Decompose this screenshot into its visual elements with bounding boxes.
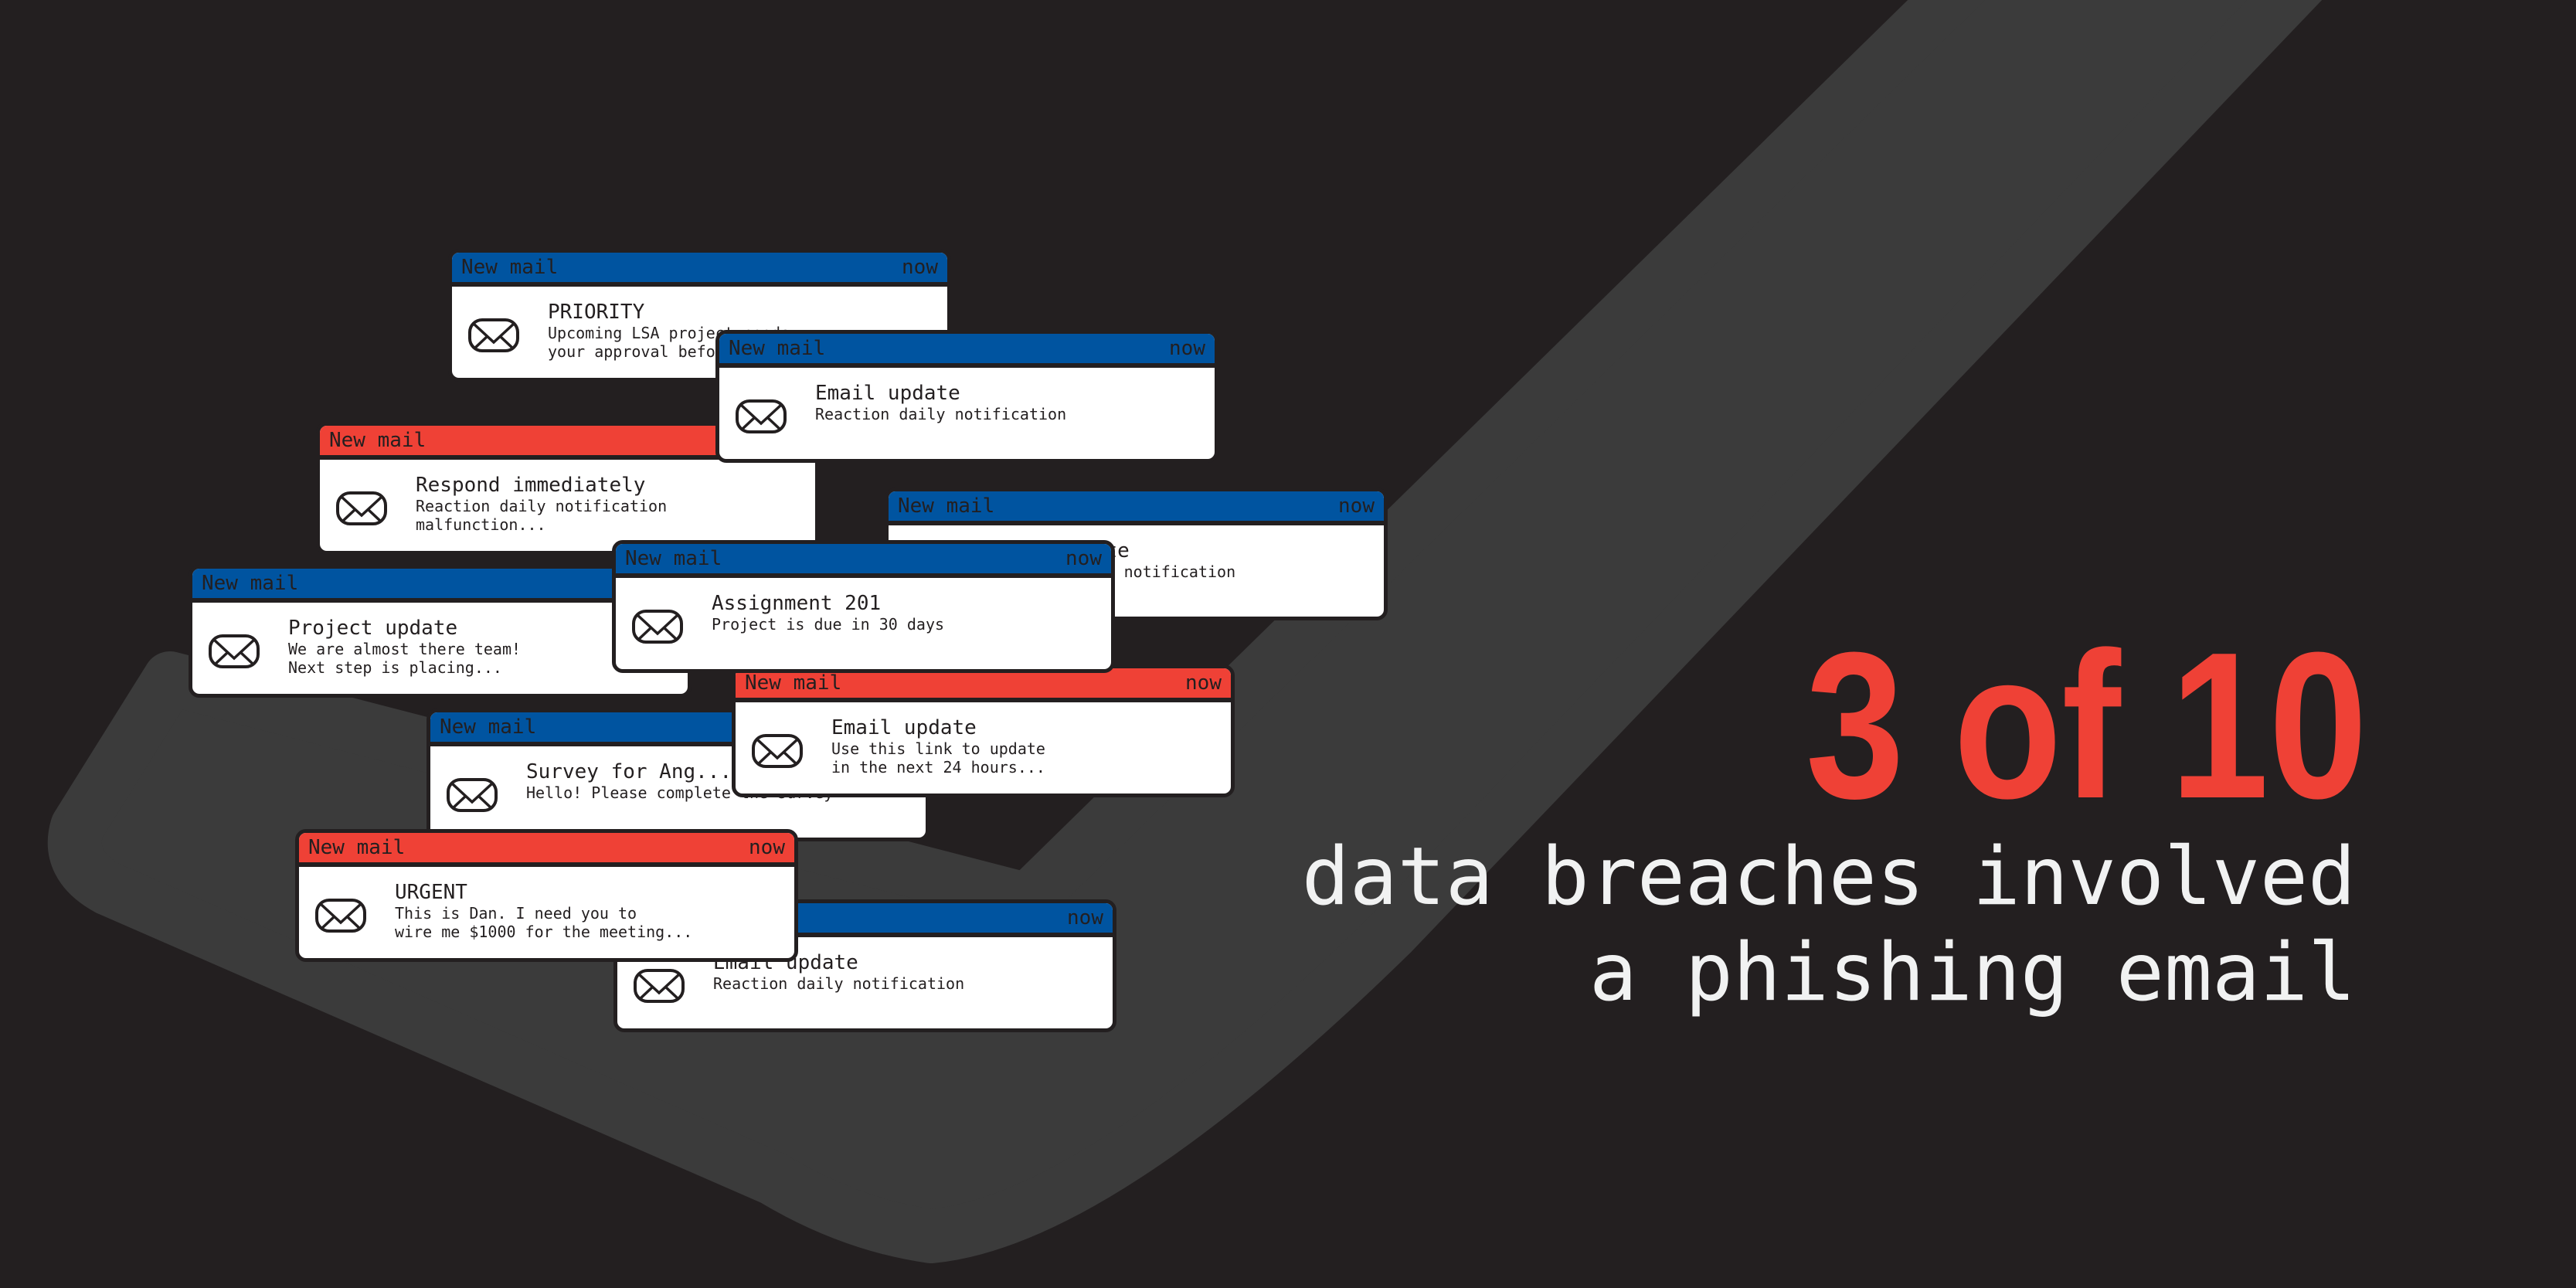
card: Email update (right, hidden): now [1338, 494, 1375, 518]
card: Email update (red): in the next 24 hours... [831, 758, 1045, 777]
subtitle text: data breaches involved [1302, 831, 2356, 923]
card: PRIORITY: your approval before... [548, 342, 762, 361]
card: PRIORITY: New mail [461, 256, 558, 279]
card: Respond immediately: now [770, 429, 806, 452]
card: URGENT: now [749, 836, 785, 859]
card: Assignment 201: New mail [625, 547, 722, 570]
card: Email update (red) [732, 664, 1235, 797]
card: URGENT: New mail [308, 836, 405, 859]
card: Project update: now [642, 572, 678, 595]
card: Assignment 201: Assignment 201 [712, 592, 881, 615]
card: Survey: now [880, 715, 916, 739]
card: PRIORITY [448, 249, 951, 382]
card: PRIORITY: Upcoming LSA project needs [548, 324, 790, 342]
card: PRIORITY: PRIORITY [548, 301, 644, 324]
card: Email update (bottom): now [1067, 906, 1103, 929]
card: Assignment 201: Project is due in 30 days [712, 615, 944, 634]
card: URGENT: This is Dan. I need you to [395, 904, 637, 923]
card: Email update (bottom): Reaction daily notification [713, 974, 964, 993]
card: Project update: Next step is placing... [288, 658, 502, 677]
card: Project update [189, 565, 692, 698]
card: Respond immediately: malfunction... [416, 515, 546, 534]
card: Email update (right, hidden): Reaction daily notification [984, 562, 1235, 581]
card: Email update (red): Email update [831, 716, 977, 739]
card: URGENT: wire me $1000 for the meeting... [395, 923, 692, 941]
card: Survey: Hello! Please complete the survey [526, 783, 833, 802]
card: Project update: New mail [202, 572, 298, 595]
card: Email update (bottom): Email update [713, 951, 858, 974]
subtitle text: a phishing email [1589, 926, 2356, 1019]
card: Email update (right, hidden): New mail [898, 494, 994, 518]
card: Email update (red): New mail [745, 671, 841, 695]
card: Survey [427, 709, 929, 841]
card: Respond immediately: New mail [329, 429, 426, 452]
card: URGENT: URGENT [395, 881, 467, 904]
card: Assignment 201: now [1065, 547, 1102, 570]
card: Email update (red): now [1185, 671, 1222, 695]
card: Respond immediately [316, 422, 819, 555]
icon: envelope [468, 318, 519, 352]
card: Project update: We are almost there team! [288, 640, 521, 658]
card: PRIORITY: now [902, 256, 938, 279]
headline: 3 of 10: 3 of 10 [1806, 610, 2367, 842]
card: Survey: New mail [440, 715, 536, 739]
subtitle text [1302, 831, 2356, 1019]
card: Email update (top): now [1169, 337, 1205, 360]
card: Project update: Project update [288, 617, 457, 640]
card: Email update (top): Email update [815, 382, 960, 405]
card: Email update (right, hidden): Email update [984, 539, 1130, 562]
card: Email update (top) [715, 330, 1218, 463]
card: URGENT [295, 829, 798, 962]
card: Respond immediately: Respond immediately [416, 474, 645, 497]
card: Email update (top): New mail [729, 337, 825, 360]
card: Email update (red): Use this link to update [831, 739, 1045, 758]
card: Respond immediately: Reaction daily notification [416, 497, 667, 515]
card: Assignment 201 [612, 540, 1115, 673]
card: Email update (bottom): New mail [627, 906, 723, 929]
card: Email update (top): Reaction daily notification [815, 405, 1066, 423]
card: Email update (bottom) [613, 899, 1116, 1032]
card: Email update (right, hidden) [885, 488, 1388, 620]
card: Survey: Survey for Ang... [526, 760, 732, 783]
